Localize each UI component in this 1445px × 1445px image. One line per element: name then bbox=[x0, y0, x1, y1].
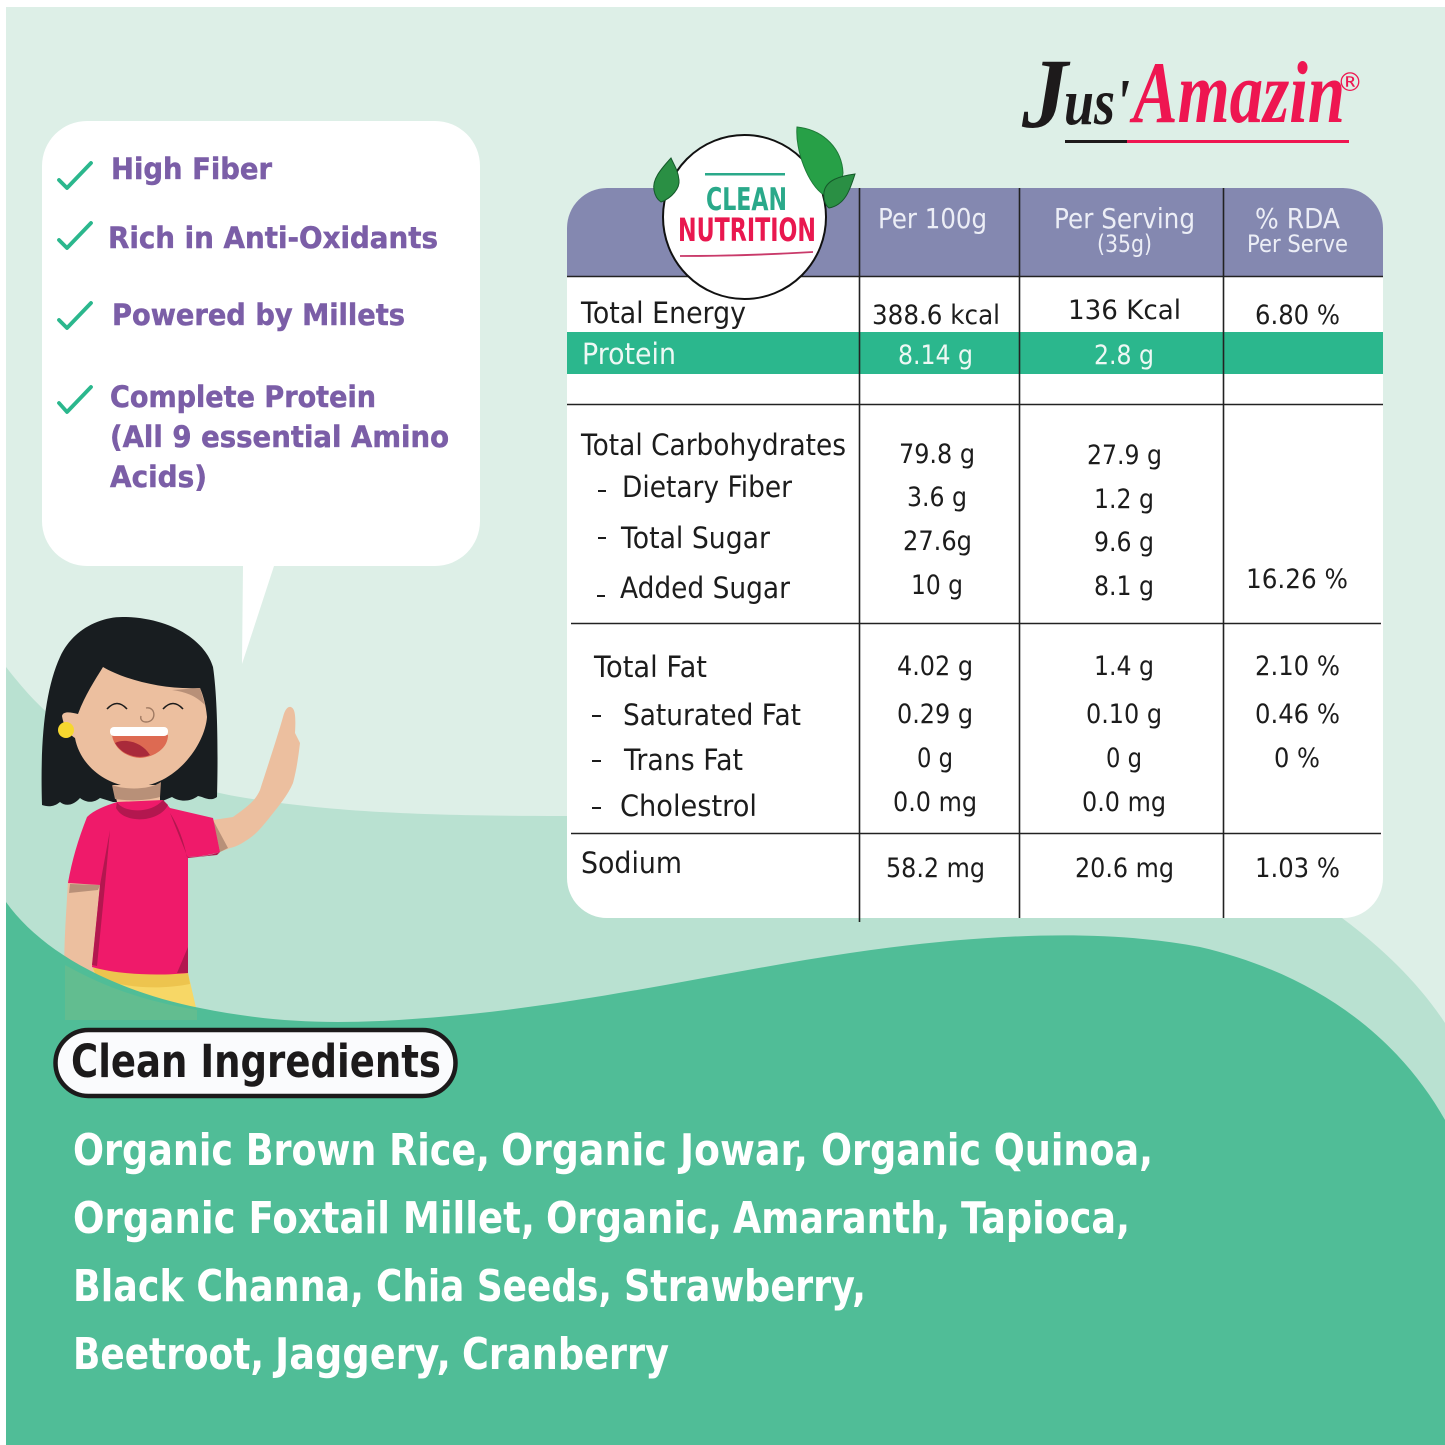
row: protein: 2.8 g bbox=[1094, 340, 1154, 371]
skirt band bbox=[93, 968, 190, 987]
row group: carbohydrates: Added Sugar bbox=[620, 571, 790, 605]
ingredients list: Jaggery, bbox=[272, 1329, 451, 1380]
clean ingredients pill: Clean Ingredients bbox=[71, 1035, 441, 1088]
shirt bbox=[68, 800, 220, 975]
benefit: antioxidants: Rich in Anti-Oxidants bbox=[108, 221, 438, 255]
protein highlight band bbox=[567, 332, 1383, 374]
ingredients list: Chia Seeds, bbox=[376, 1261, 612, 1312]
row: protein: Protein bbox=[582, 337, 676, 371]
header labels bbox=[878, 202, 1348, 258]
row group: fats: 4.02 g bbox=[897, 651, 973, 682]
row: energy: 388.6 kcal bbox=[872, 300, 1000, 331]
ingredients list: Organic, bbox=[546, 1193, 722, 1244]
check icon bbox=[59, 163, 91, 188]
row: sodium: 58.2 mg bbox=[886, 853, 985, 884]
row group: carbohydrates: 3.6 g bbox=[907, 482, 967, 513]
row group: fats: Saturated Fat bbox=[623, 698, 801, 732]
faded figure base bbox=[65, 965, 197, 1020]
benefit: millets: Powered by Millets bbox=[112, 298, 405, 332]
row group: fats: 0 % bbox=[1274, 743, 1320, 774]
shirt shadows bbox=[92, 830, 188, 973]
ingredients list: Tapioca, bbox=[961, 1193, 1130, 1244]
header labels: % RDA bbox=[1255, 202, 1340, 235]
row group: fats: 0.29 g bbox=[897, 699, 973, 730]
teeth bbox=[110, 727, 168, 736]
row: sodium: Sodium bbox=[581, 846, 682, 880]
ingredients list: Cranberry bbox=[462, 1329, 669, 1380]
row group: carbohydrates: 79.8 g bbox=[899, 439, 975, 470]
row: sodium bbox=[581, 846, 1340, 884]
ingredients list: Organic Brown Rice, bbox=[73, 1125, 490, 1176]
row group: carbohydrates: 8.1 g bbox=[1094, 571, 1154, 602]
row group: fats: Total Fat bbox=[593, 650, 707, 684]
row group: carbohydrates: Total Carbohydrates bbox=[580, 428, 846, 462]
row group: fats: 0.10 g bbox=[1086, 699, 1162, 730]
clean ingredients pill bbox=[56, 1030, 456, 1096]
brand logo: Amazin bbox=[1129, 45, 1345, 142]
face bbox=[62, 667, 207, 787]
benefits list bbox=[59, 152, 449, 494]
badge underline bbox=[680, 252, 813, 256]
table header band bbox=[567, 188, 1383, 276]
check icon bbox=[59, 303, 91, 328]
row: energy: 6.80 % bbox=[1255, 300, 1340, 331]
row group: fats: Trans Fat bbox=[623, 743, 743, 777]
clean nutrition badge bbox=[654, 127, 855, 299]
row group: carbohydrates: 1.2 g bbox=[1094, 484, 1154, 515]
raised arm bbox=[213, 707, 300, 852]
sleeve shadow bbox=[170, 813, 220, 858]
eyes bbox=[107, 704, 183, 709]
row: protein: 8.14 g bbox=[898, 340, 973, 371]
neck bbox=[113, 785, 160, 809]
ingredients list: Organic Jowar, bbox=[501, 1125, 808, 1176]
row: protein bbox=[582, 337, 1154, 371]
row group: carbohydrates bbox=[580, 428, 1348, 605]
background wave: light green bbox=[6, 667, 1445, 1445]
table body bbox=[567, 188, 1383, 918]
character: girl pointing up bbox=[42, 617, 300, 1012]
ingredients list: Organic Quinoa, bbox=[821, 1125, 1153, 1176]
row group: carbohydrates: 10 g bbox=[911, 570, 963, 601]
badge text: nutrition: NUTRITION bbox=[678, 211, 816, 249]
row: energy: Total Energy bbox=[580, 296, 746, 330]
row group: carbohydrates: 27.6g bbox=[903, 526, 972, 557]
badge circle bbox=[663, 135, 826, 299]
left sleeve shade bbox=[69, 884, 100, 893]
header labels: Per 100g bbox=[878, 202, 987, 235]
tongue bbox=[115, 741, 150, 757]
row group: fats: 0.0 mg bbox=[1082, 787, 1166, 818]
collar bbox=[116, 800, 168, 819]
ingredients list: Amaranth, bbox=[733, 1193, 950, 1244]
left arm bbox=[64, 880, 100, 1000]
nutrition table bbox=[567, 188, 1383, 922]
row: energy bbox=[580, 295, 1340, 331]
row group: carbohydrates: Total Sugar bbox=[620, 521, 770, 555]
benefit: complete protein: (All 9 essential Amino bbox=[110, 420, 449, 454]
benefit: complete protein: Complete Protein bbox=[110, 380, 376, 414]
grid lines bbox=[567, 188, 1383, 922]
ingredients list bbox=[73, 1125, 1153, 1380]
brand logo: J bbox=[1021, 38, 1071, 149]
icon: left leaf bbox=[654, 158, 679, 202]
fringe shadow bbox=[172, 688, 205, 705]
benefit: complete protein bbox=[110, 380, 449, 494]
row group: carbohydrates: Dietary Fiber bbox=[622, 470, 792, 504]
row group: fats: 0.46 % bbox=[1255, 699, 1340, 730]
brand logo: us' bbox=[1064, 66, 1130, 139]
icon: small right leaf bbox=[824, 174, 855, 208]
skirt bbox=[93, 968, 197, 1012]
badge text: clean: CLEAN bbox=[706, 182, 787, 218]
row: sodium: 20.6 mg bbox=[1075, 853, 1174, 884]
badge top rule bbox=[705, 173, 785, 176]
mouth bbox=[112, 735, 168, 758]
check icon bbox=[59, 387, 91, 412]
row group: fats: 1.4 g bbox=[1094, 651, 1154, 682]
row group: carbohydrates: 16.26 % bbox=[1246, 564, 1348, 595]
benefit: high fiber: High Fiber bbox=[111, 152, 273, 186]
row group: fats: 0 g bbox=[917, 743, 953, 774]
row: sodium: 1.03 % bbox=[1255, 853, 1340, 884]
header labels: Per Serve bbox=[1247, 230, 1348, 258]
brand logo bbox=[1021, 38, 1363, 149]
row group: fats: Cholestrol bbox=[620, 789, 757, 823]
ingredients list: Beetroot, bbox=[73, 1329, 264, 1380]
row group: fats: 0 g bbox=[1106, 743, 1142, 774]
row group: carbohydrates: 27.9 g bbox=[1087, 440, 1162, 471]
earring bbox=[58, 722, 74, 738]
check icon bbox=[59, 223, 91, 248]
speech bubble bbox=[42, 121, 480, 664]
ingredients list: Strawberry, bbox=[624, 1261, 866, 1312]
header labels: Per Serving bbox=[1054, 202, 1195, 235]
ingredients list: Black Channa, bbox=[73, 1261, 364, 1312]
icon: big leaf bbox=[797, 127, 843, 195]
row: energy: 136 Kcal bbox=[1068, 295, 1181, 326]
header labels: (35g) bbox=[1097, 230, 1152, 258]
elbow shade bbox=[213, 820, 228, 852]
row group: fats bbox=[592, 650, 1340, 823]
foreground wave: dark green bbox=[6, 902, 1445, 1445]
neck shadow bbox=[112, 782, 161, 800]
brand logo: ® bbox=[1337, 68, 1363, 98]
nose bbox=[141, 708, 154, 722]
benefit: complete protein: Acids) bbox=[110, 460, 207, 494]
row group: fats: 2.10 % bbox=[1255, 651, 1340, 682]
row group: fats: 0.0 mg bbox=[893, 787, 977, 818]
row group: carbohydrates: 9.6 g bbox=[1094, 527, 1154, 558]
hair bbox=[42, 617, 218, 806]
ingredients list: Organic Foxtail Millet, bbox=[73, 1193, 535, 1244]
